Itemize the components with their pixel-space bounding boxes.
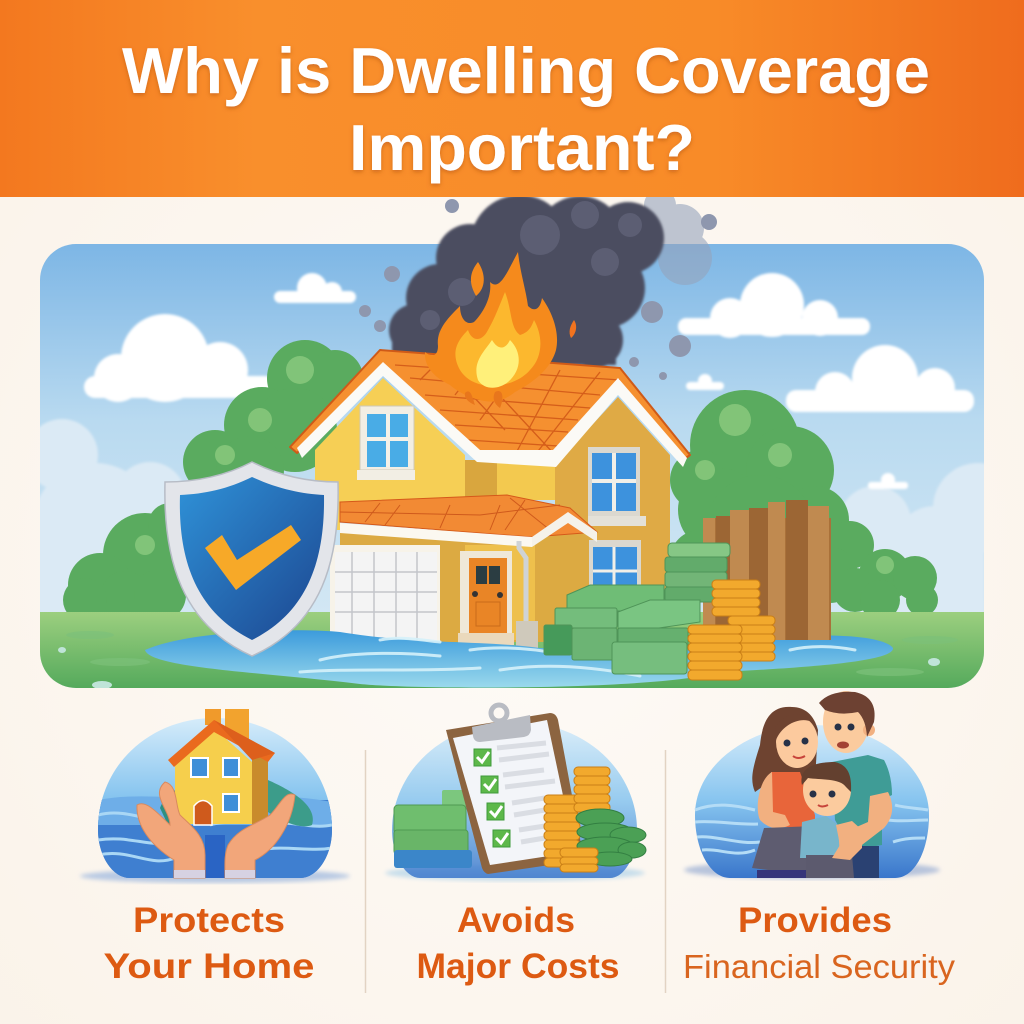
porch roof [340, 495, 597, 547]
gold coin stacks [688, 580, 775, 680]
smoke cloud [359, 189, 717, 380]
garage door [330, 545, 440, 645]
burning house [290, 350, 690, 655]
panel: house scene [25, 189, 1023, 689]
title [122, 34, 930, 184]
label: provides financial security [683, 901, 956, 985]
downspout [516, 541, 538, 655]
upper left window [357, 406, 415, 480]
title: Important? [349, 111, 695, 184]
upper right window [588, 447, 646, 526]
title: Why is Dwelling Coverage [122, 34, 930, 107]
icon: family [684, 691, 940, 879]
front door [458, 551, 514, 645]
label: avoids major costs: Avoids [457, 901, 575, 940]
column: avoids major costs [385, 705, 646, 986]
column: provides financial security [683, 691, 956, 985]
money stacks [544, 543, 730, 674]
label: provides financial security: Financial Security [683, 948, 956, 985]
boy [800, 762, 862, 878]
label: protects your home: Your Home [104, 947, 314, 986]
column: protects your home [80, 709, 350, 986]
flood water [145, 630, 893, 688]
man [819, 691, 892, 878]
shield with checkmark [165, 462, 338, 656]
label: avoids major costs [416, 901, 620, 986]
label: avoids major costs: Major Costs [416, 947, 620, 986]
house walls [315, 378, 670, 642]
label: protects your home: Protects [133, 901, 285, 940]
icon: house held in hands [80, 709, 350, 883]
label: provides financial security: Provides [738, 901, 892, 940]
orange roof [290, 350, 690, 460]
flames [425, 252, 576, 408]
icon: checklist, cash and coins [385, 705, 646, 881]
white roof trim [297, 362, 687, 467]
header banner [0, 0, 1024, 197]
lower right window [589, 540, 641, 590]
scene sky and landscape [25, 244, 1023, 689]
wooden fence [703, 500, 831, 640]
label: protects your home [104, 901, 314, 986]
woman [752, 707, 818, 878]
